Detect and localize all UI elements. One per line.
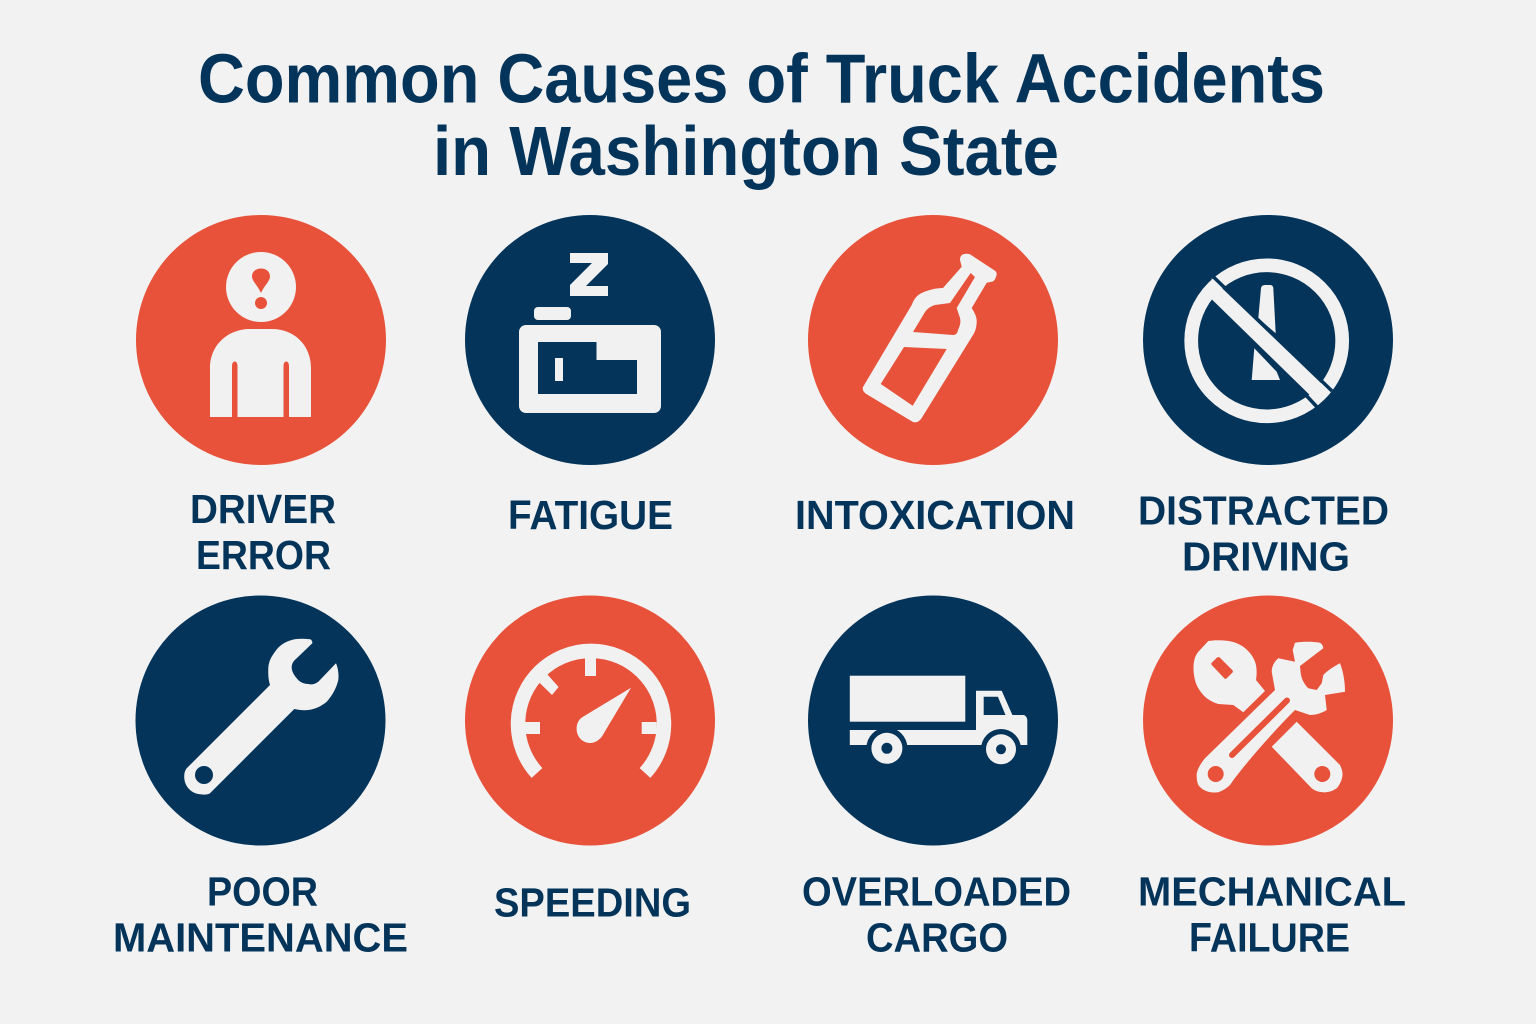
label: overloaded cargo: OVERLOADED bbox=[802, 868, 1071, 914]
label: speeding: SPEEDING bbox=[494, 880, 691, 926]
panel: distracted driving bbox=[1138, 215, 1393, 580]
label: poor maintenance: POOR bbox=[207, 868, 318, 914]
label: poor maintenance bbox=[113, 868, 408, 960]
label: mechanical failure: MECHANICAL bbox=[1138, 868, 1406, 914]
label: mechanical failure bbox=[1138, 868, 1406, 960]
icon: z over battery bed bbox=[519, 253, 661, 413]
label: distracted driving: DRIVING bbox=[1182, 534, 1350, 580]
label: distracted driving: DISTRACTED bbox=[1138, 488, 1389, 534]
title bbox=[198, 40, 1325, 190]
title: in Washington State bbox=[433, 112, 1059, 190]
icon: bottle bbox=[863, 254, 997, 422]
icon: person with exclamation bbox=[210, 252, 311, 417]
label: overloaded cargo bbox=[802, 868, 1071, 960]
icon: crossed wrenches bbox=[1193, 640, 1345, 793]
label: intoxication: INTOXICATION bbox=[795, 492, 1075, 538]
circle: driver error background bbox=[136, 215, 386, 465]
icon: wrench bbox=[184, 639, 339, 795]
label: distracted driving bbox=[1138, 488, 1389, 580]
circle: speeding background bbox=[465, 596, 715, 846]
circle: fatigue background bbox=[465, 215, 715, 465]
label: driver error: ERROR bbox=[196, 532, 331, 578]
circle: distracted driving background bbox=[1143, 215, 1393, 465]
label: poor maintenance: MAINTENANCE bbox=[113, 914, 408, 960]
label: driver error: DRIVER bbox=[190, 486, 336, 532]
panel: mechanical failure bbox=[1138, 596, 1406, 960]
panel: poor maintenance bbox=[113, 596, 408, 960]
circle: mechanical failure background bbox=[1143, 596, 1393, 846]
title: Common Causes of Truck Accidents bbox=[198, 40, 1325, 118]
circle: overloaded cargo background bbox=[808, 596, 1058, 846]
panel: fatigue bbox=[465, 215, 715, 538]
panel: driver error bbox=[136, 215, 386, 578]
label: driver error bbox=[190, 486, 336, 578]
circle: intoxication background bbox=[808, 215, 1058, 465]
panel: intoxication bbox=[795, 215, 1075, 538]
label: fatigue: FATIGUE bbox=[508, 492, 673, 538]
icon: truck bbox=[850, 676, 1027, 769]
icon: speedometer bbox=[518, 651, 664, 773]
circle: poor maintenance background bbox=[136, 596, 386, 846]
panel: overloaded cargo bbox=[802, 596, 1071, 960]
label: overloaded cargo: CARGO bbox=[866, 914, 1008, 960]
label: mechanical failure: FAILURE bbox=[1189, 914, 1350, 960]
panel: speeding bbox=[465, 596, 715, 926]
icon: prohibited road sign bbox=[1191, 265, 1342, 416]
